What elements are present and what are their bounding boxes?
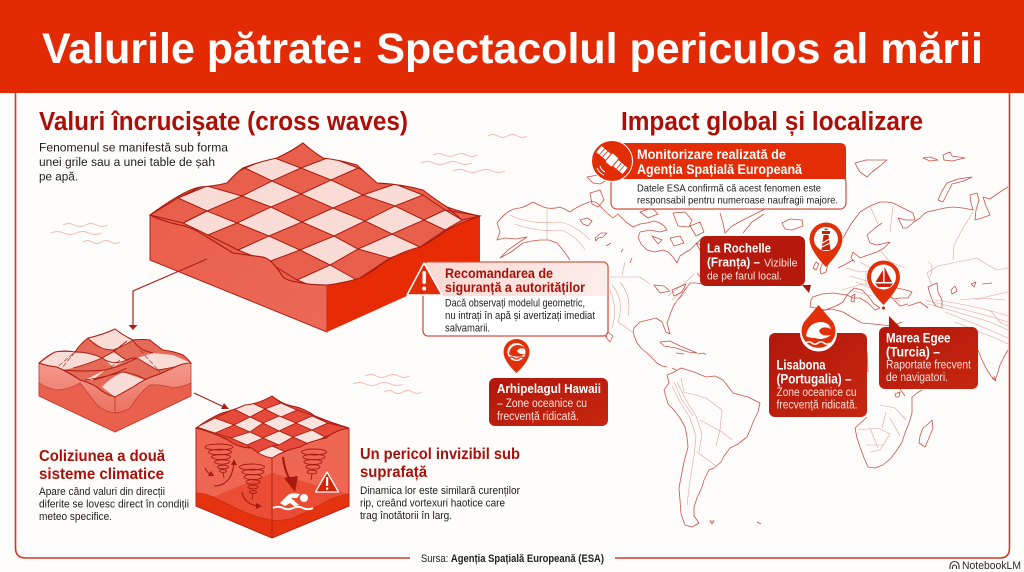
large checkerboard water block (145, 140, 485, 332)
cube middle water layer (196, 473, 349, 538)
La Rochelle card: (Franța) – (707, 254, 760, 270)
ESA monitoring card: Agenția Spațială Europeană (637, 162, 802, 177)
title: Valurile pătrate: Spectacolul periculos al mării (42, 25, 983, 73)
intro text: pe apă. (39, 170, 78, 184)
text block: invisible danger (360, 446, 520, 522)
Great Lakes (654, 284, 686, 296)
card: Hawaii: – Zone oceanice cu (497, 398, 587, 410)
Greenland and Iceland (720, 205, 803, 233)
Himalaya contours (925, 292, 1008, 344)
block left face (150, 215, 327, 332)
La Rochelle card: La Rochelle (707, 240, 771, 256)
current arrows (205, 459, 262, 509)
content frame (16, 93, 1010, 558)
collision block illustration (35, 326, 195, 432)
Russia north coast and Asia (927, 177, 1008, 220)
cube top surface (197, 396, 347, 458)
icon: warning triangle (316, 472, 338, 492)
Marea Egee card: Raportate frecvent (886, 360, 972, 372)
La Rochelle card (700, 236, 805, 286)
text block: collision: Coliziunea a două (39, 448, 165, 465)
danger cube illustration (192, 392, 352, 538)
safety recommendation card: nu intrați în apă și avertizați imediat (445, 310, 595, 322)
ESA monitoring card: Datele ESA confirmă că acest fenomen este (637, 182, 821, 194)
text block: collision: sisteme climatice (39, 466, 164, 483)
left section heading: Valuri încrucișate (cross waves) (39, 108, 408, 136)
icon: swimmer (273, 493, 313, 509)
La Rochelle card: Vizibile (764, 258, 798, 270)
ESA monitoring card (592, 140, 846, 209)
Lisbon card: frecvență ridicată. (776, 400, 858, 412)
collision block right face (115, 363, 191, 432)
text block: collision: diferite se lovesc direct în condiții (39, 498, 189, 510)
La Rochelle card: de pe farul local. (707, 270, 782, 282)
intro text: Fenomenul se manifestă sub forma (39, 140, 228, 154)
Caspian Sea (928, 282, 992, 308)
Marea Egee card: de navigatori. (886, 372, 948, 384)
card: Hawaii (489, 378, 608, 426)
block top surface (151, 144, 478, 284)
text block: collision: Apare când valuri din direcții (39, 486, 165, 498)
Lisbon card: Zone oceanice cu (776, 387, 856, 399)
Svalbard and Franz Josef (855, 152, 965, 177)
card: Hawaii: frecvență ridicată. (497, 411, 579, 423)
text block: invisible danger: suprafață (360, 464, 427, 481)
ESA monitoring card: responsabil pentru numeroase naufragii majore. (637, 194, 838, 206)
icon: warning (407, 263, 442, 295)
Indian subcontinent (978, 350, 1008, 381)
header band (0, 0, 1024, 93)
ESA monitoring card: Monitorizare realizată de (637, 147, 786, 162)
South America (664, 368, 760, 527)
world map outlines (497, 152, 1008, 527)
text block: invisible danger: rip, creând vortexuri haotice care (360, 498, 505, 510)
icon: vortex middle (240, 464, 264, 500)
icon: sailboat pin (867, 261, 900, 305)
collision block lower water (39, 383, 191, 432)
text block: collision: meteo specifice. (39, 511, 112, 523)
arrow: pull down (283, 457, 298, 492)
safety recommendation card: Recomandarea de (445, 265, 553, 281)
Marea Egee card: Marea Egee (886, 330, 951, 346)
Hawaii marker (489, 339, 608, 426)
Lisbon card: (Portugalia) – (776, 372, 852, 386)
text block: invisible danger: Dinamica lor este similară curenților (360, 485, 520, 497)
Lisbon card (769, 333, 867, 417)
NotebookLM watermark: NotebookLM (962, 560, 1021, 572)
pointer: La Rochelle (802, 285, 811, 293)
icon: satellite (592, 140, 632, 182)
Mediterranean coast and Middle East (820, 300, 928, 326)
North America (497, 202, 703, 367)
Caribbean (660, 341, 706, 370)
cube left face (196, 428, 272, 538)
pointer: Marea Egee (889, 316, 900, 327)
safety recommendation card: Dacă observați modelul geometric, (445, 298, 585, 310)
source line: Sursa: Agenția Spațială Europeană (ESA) (421, 553, 604, 565)
text block: invisible danger: Un pericol invizibil sub (360, 446, 520, 463)
cube deep water layer (196, 493, 349, 538)
safety recommendation card: salvamarii. (445, 322, 490, 334)
collision block top surface (40, 330, 190, 396)
icon: Lisbon wave drop (800, 305, 837, 352)
arrow: collision block to danger cube (194, 393, 229, 409)
icon: NotebookLM mark (950, 562, 959, 569)
icon: lighthouse pin (810, 223, 842, 267)
intro text: unei grile sau a unei table de șah (39, 155, 215, 169)
safety recommendation card (407, 262, 608, 336)
right section heading: Impact global și localizare (621, 108, 923, 136)
safety recommendation card: siguranță a autorităților (445, 279, 585, 295)
card: Hawaii: Arhipelagul Hawaii (497, 381, 601, 396)
Marea Egee card (879, 327, 978, 389)
collision block left face (39, 363, 115, 432)
intro text (39, 140, 228, 184)
text block: collision (39, 448, 189, 523)
block right face (327, 216, 480, 332)
icon: vortex right (302, 449, 326, 480)
Scandinavia and Europe (810, 202, 927, 310)
decorative wave marks (51, 134, 527, 394)
Marea Egee card: (Turcia) – (886, 344, 940, 360)
cube right face (272, 428, 349, 538)
arrow: large block to collision block (128, 259, 207, 330)
text block: invisible danger: trag înotătorii în larg. (360, 510, 452, 522)
icon: vortex left (205, 444, 233, 478)
Africa (855, 352, 922, 468)
Canadian arctic islands (580, 175, 704, 263)
Lisbon card: Lisabona (776, 358, 826, 372)
icon: Hawaii pin (504, 339, 530, 373)
